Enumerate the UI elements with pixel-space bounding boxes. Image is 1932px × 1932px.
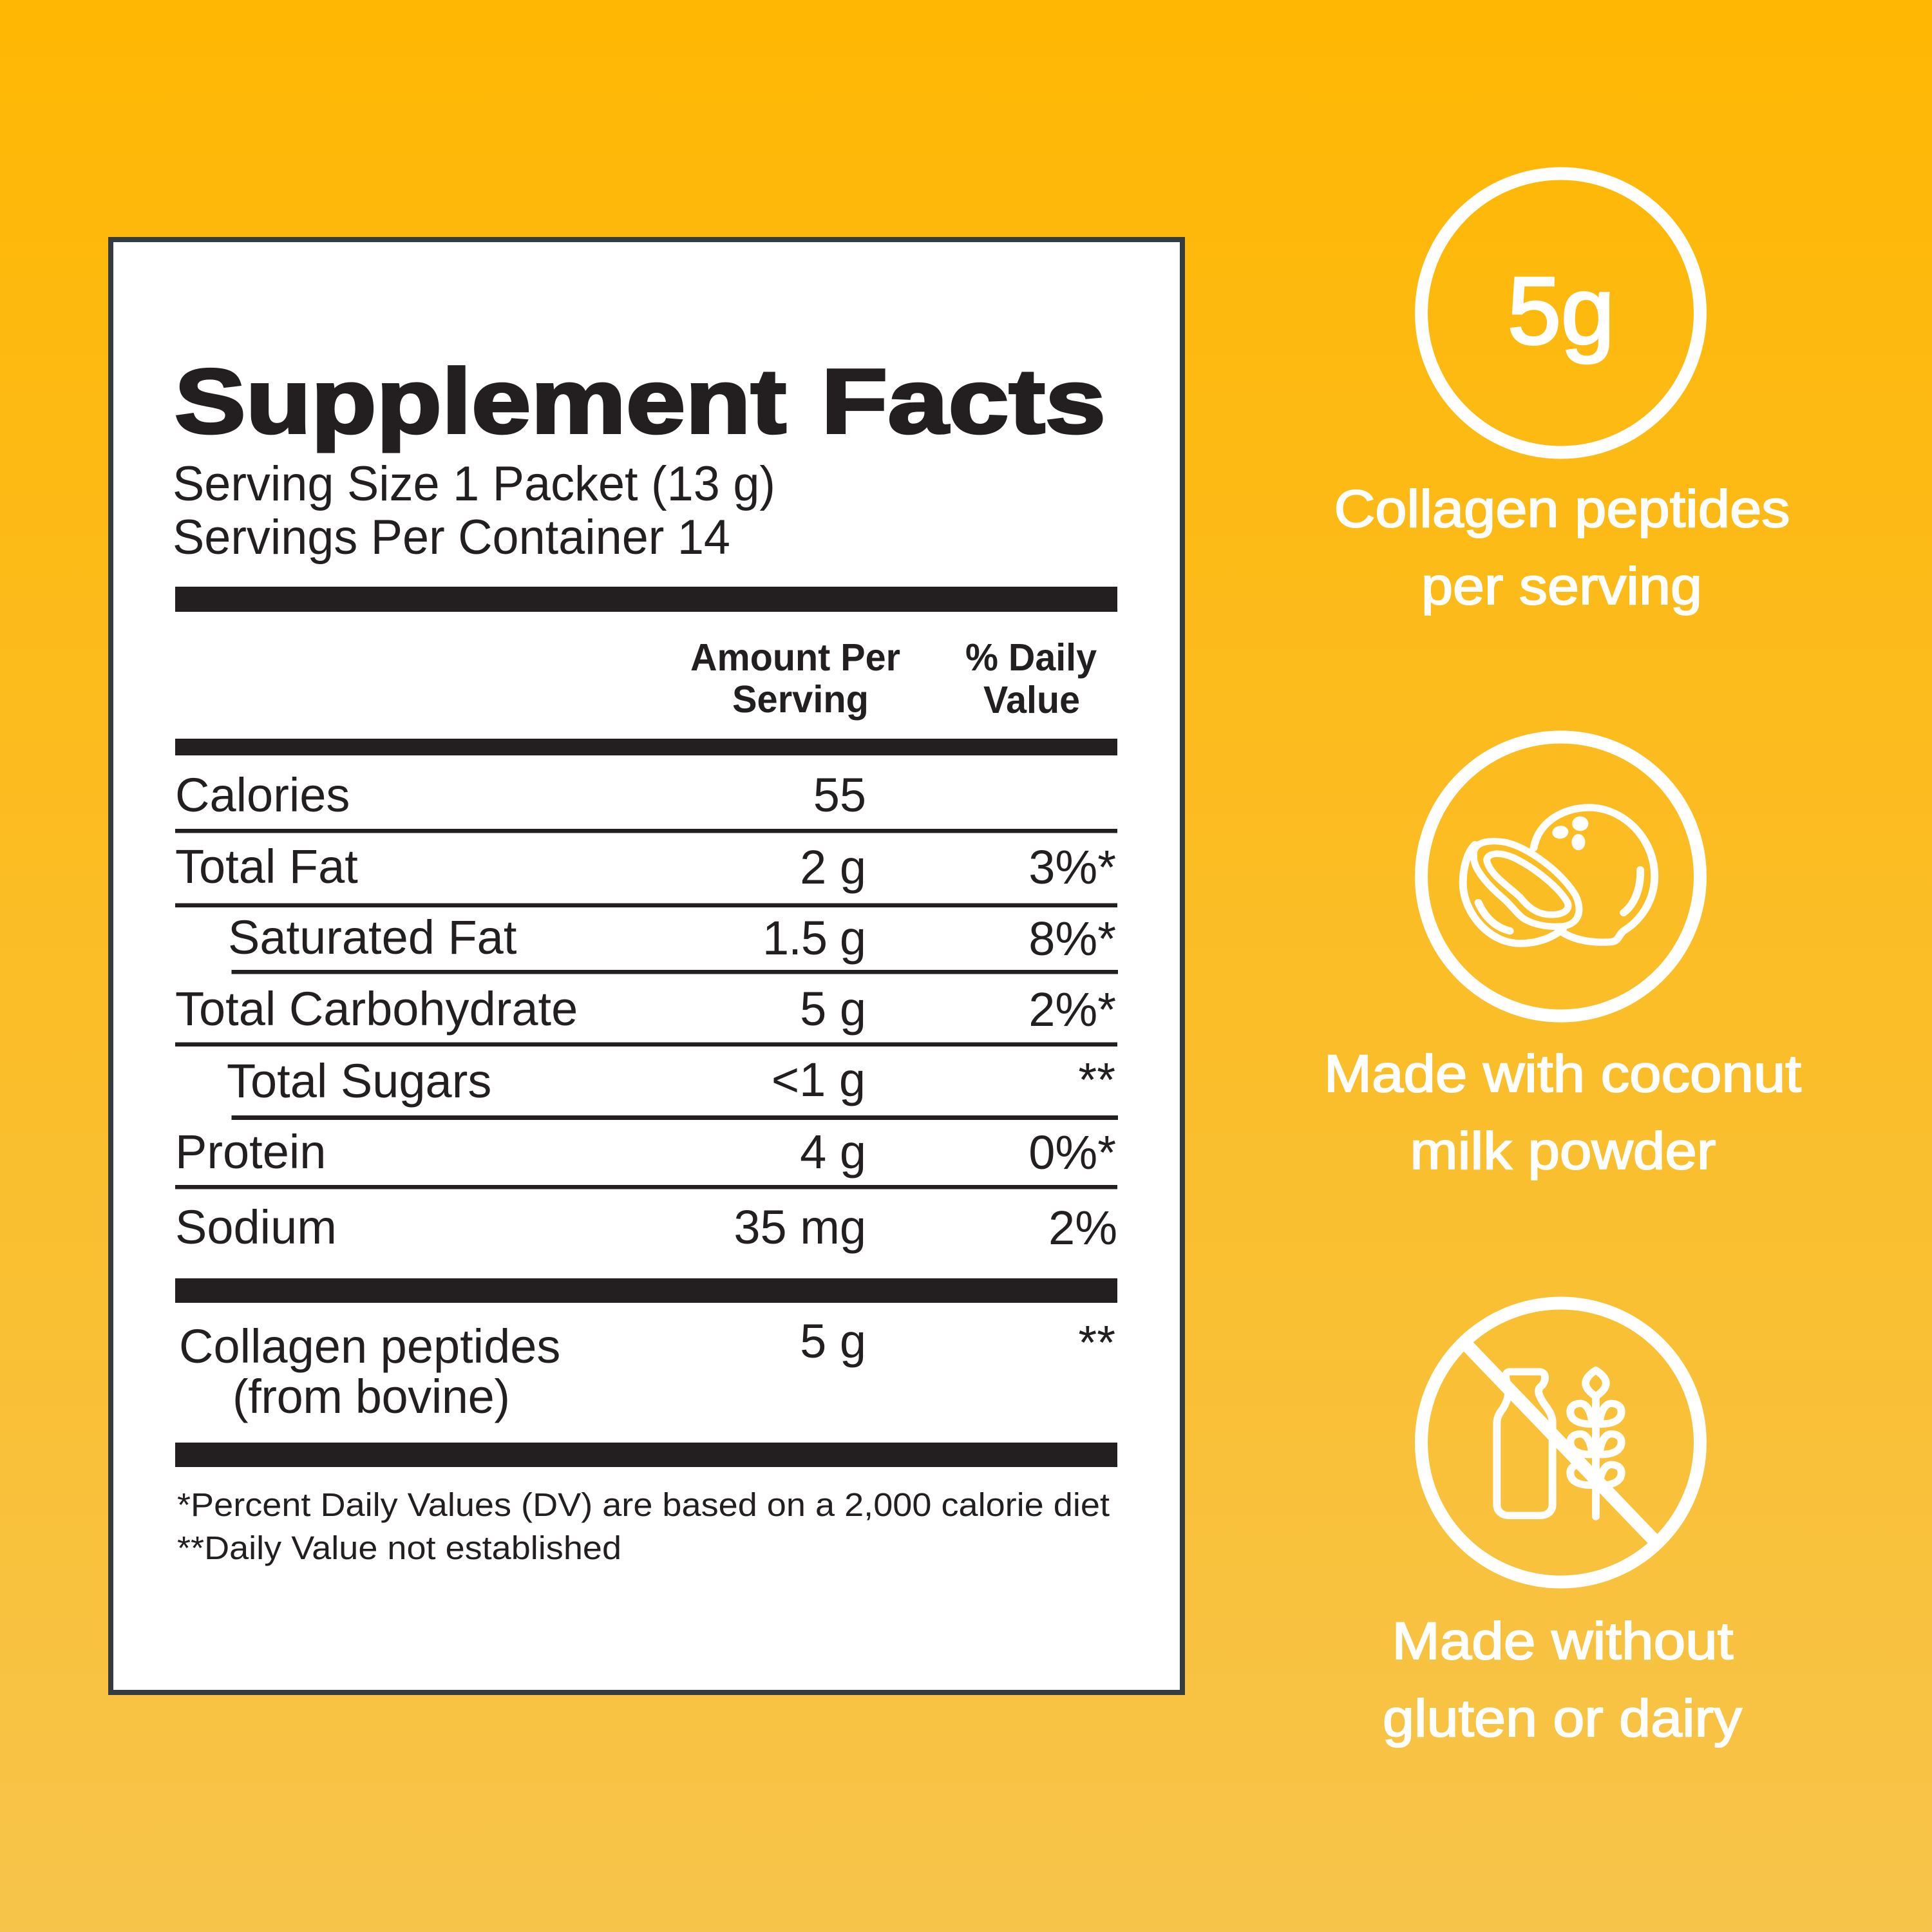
icon: crossed out milk bottle and wheat	[1464, 1342, 1656, 1542]
row: protein	[175, 1125, 1116, 1179]
caption: collagen peptides: Collagen peptides	[1334, 480, 1790, 538]
row: total sugars: **	[1078, 1053, 1115, 1106]
title: Facts	[821, 350, 1106, 453]
row: calories: Calories	[175, 768, 350, 822]
row: total fat: 2 g	[800, 840, 866, 894]
row: total fat	[175, 840, 1116, 894]
caption: without gluten or dairy: Made without	[1392, 1612, 1734, 1671]
callout: 5g collagen	[1334, 174, 1790, 616]
serving information	[173, 457, 775, 565]
row: total sugars	[227, 1053, 1115, 1108]
column headers: Serving	[732, 678, 869, 721]
row: saturated fat: Saturated Fat	[228, 911, 517, 964]
row: calories: 55	[813, 768, 866, 822]
row: total sugars: Total Sugars	[227, 1054, 491, 1108]
row: collagen peptides: **	[1078, 1316, 1115, 1369]
row: total sugars: <1 g	[772, 1053, 866, 1106]
title: Supplement	[175, 350, 786, 453]
row: saturated fat: 8%*	[1028, 912, 1116, 965]
row: total carbohydrate: Total Carbohydrate	[175, 982, 578, 1036]
row: collagen peptides: Collagen peptides	[179, 1320, 560, 1373]
row: calories	[175, 768, 866, 822]
row: total carbohydrate: 5 g	[800, 982, 866, 1036]
row: total carbohydrate: 2%*	[1028, 983, 1116, 1036]
row: total fat: 3%*	[1028, 840, 1116, 894]
caption: collagen peptides	[1334, 480, 1790, 616]
footnotes: *Percent Daily Values (DV) are based on a 2,000 calorie diet	[177, 1486, 1110, 1523]
row: collagen peptides: 5 g	[800, 1314, 866, 1368]
icon: circle ring	[1421, 737, 1700, 1016]
table rules	[175, 587, 1118, 1467]
caption: collagen peptides: per serving	[1421, 557, 1702, 616]
row: protein: Protein	[175, 1125, 326, 1179]
row: protein: 4 g	[800, 1125, 866, 1179]
column headers: % Daily	[965, 636, 1097, 679]
icon: 5g circle: 5g	[1508, 258, 1615, 365]
panel frame	[111, 240, 1182, 1692]
icon: circle ring	[1421, 1303, 1700, 1582]
icon: 5g circle	[1421, 174, 1700, 452]
serving information: Serving Size 1 Packet (13 g)	[173, 457, 775, 511]
callout: coconut milk	[1324, 737, 1801, 1180]
row: sodium: 35 mg	[734, 1200, 866, 1254]
column headers	[690, 636, 1097, 721]
panel: supplement facts label	[111, 240, 1182, 1692]
callout: no gluten or dairy	[1383, 1303, 1742, 1748]
row: sodium	[175, 1200, 1117, 1255]
title	[175, 350, 1106, 453]
row: total fat: Total Fat	[175, 840, 358, 893]
column headers: Amount Per	[690, 636, 900, 679]
caption: without gluten or dairy	[1383, 1612, 1742, 1748]
icon: coconut	[1463, 808, 1654, 943]
row: protein: 0%*	[1028, 1126, 1116, 1179]
caption: coconut milk powder	[1324, 1045, 1801, 1180]
column headers: Value	[983, 679, 1080, 721]
caption: coconut milk powder: Made with coconut	[1324, 1045, 1801, 1103]
row: saturated fat: 1.5 g	[762, 911, 866, 965]
footnotes: **Daily Value not established	[177, 1530, 621, 1566]
row: total carbohydrate	[175, 982, 1116, 1036]
row: collagen peptides	[179, 1314, 1115, 1423]
caption: coconut milk powder: milk powder	[1410, 1122, 1716, 1180]
row: collagen peptides: (from bovine)	[232, 1370, 510, 1423]
serving information: Servings Per Container 14	[173, 510, 730, 565]
caption: without gluten or dairy: gluten or dairy	[1383, 1689, 1742, 1748]
row: saturated fat	[228, 911, 1116, 965]
row: sodium: 2%	[1048, 1201, 1117, 1255]
footnotes	[177, 1486, 1110, 1566]
row: sodium: Sodium	[175, 1200, 337, 1254]
